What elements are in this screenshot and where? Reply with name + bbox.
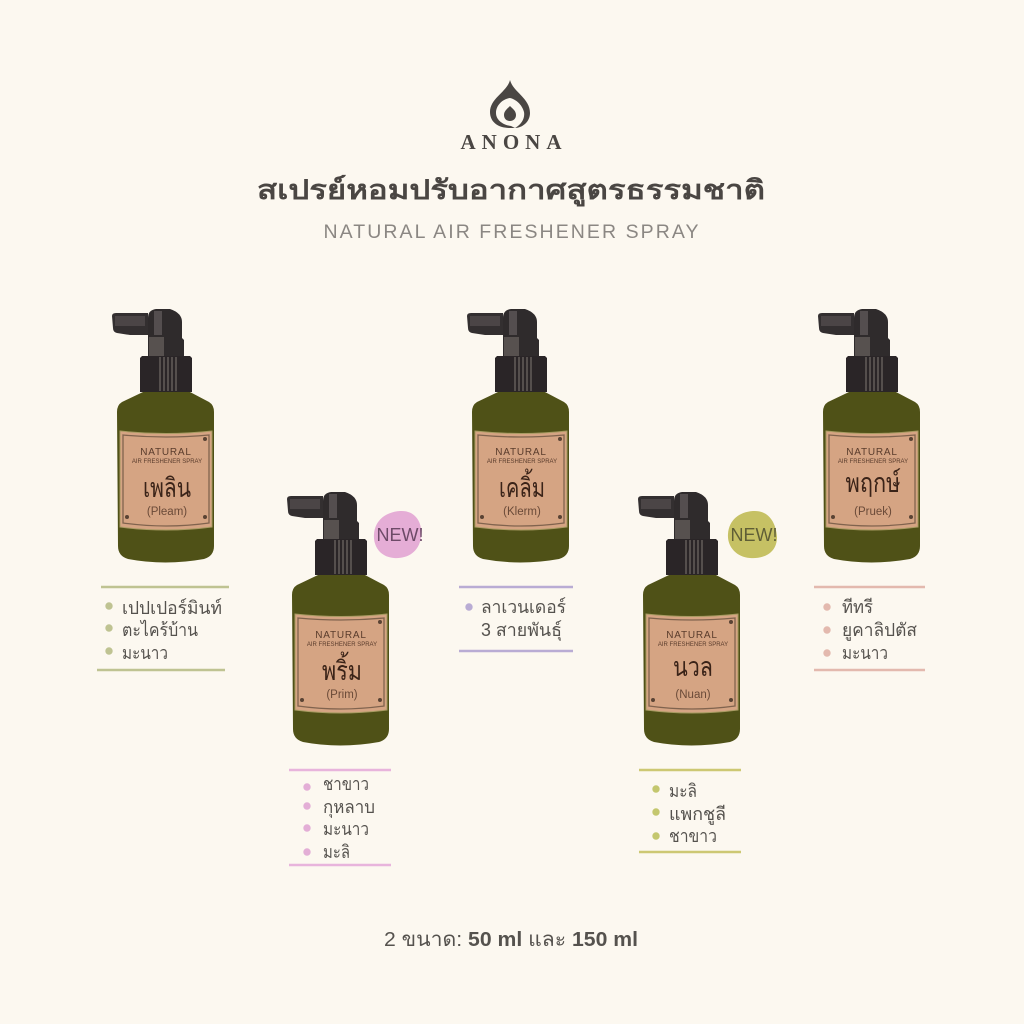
bottle: Pruek: (Pruek)	[854, 506, 892, 518]
bottle: Prim: (Prim)	[326, 689, 358, 701]
bottle: Pleam: AIR FRESHENER SPRAY	[132, 459, 202, 465]
ingredients: Nuan: ชาขาว	[669, 826, 717, 846]
bottle: Pruek: พฤกษ์	[846, 467, 901, 498]
footer: sizes: 2 ขนาด: 50 ml และ 150 ml	[384, 929, 638, 951]
bottle: Pleam: (Pleam)	[147, 506, 187, 518]
bottle: Klerm: NATURAL	[495, 447, 547, 458]
brand name: ANONA	[460, 130, 562, 154]
bottle: Pleam: เพลิน	[143, 473, 191, 503]
ingredients: Pleam	[97, 587, 229, 670]
bottle: Nuan	[638, 492, 740, 746]
ingredients: Pruek: ทีทรี	[842, 597, 873, 617]
bottle: Klerm: (Klerm)	[503, 506, 541, 518]
ingredients: Nuan	[639, 770, 741, 852]
bottle: Prim: AIR FRESHENER SPRAY	[307, 642, 377, 648]
bottle: Pruek: AIR FRESHENER SPRAY	[838, 459, 908, 465]
ingredients: Pleam: มะนาว	[122, 643, 168, 663]
badge: new olive	[728, 511, 778, 558]
ingredients: Pleam: ตะไคร้บ้าน	[122, 619, 198, 640]
ingredients: Prim: มะนาว	[323, 819, 369, 839]
ingredients: Pruek	[814, 587, 925, 670]
ingredients: Klerm: ลาเวนเดอร์	[481, 597, 566, 617]
ingredients: Nuan: แพกชูลี	[669, 804, 726, 825]
ingredients: Pruek: ยูคาลิปตัส	[842, 620, 917, 641]
bottle: Prim: NATURAL	[315, 630, 367, 641]
bottle: Pleam: NATURAL	[140, 447, 192, 458]
badge: new pink: NEW!	[376, 525, 424, 545]
bottle: Klerm	[467, 309, 569, 562]
ingredients: Prim	[289, 770, 391, 865]
ingredients: Pruek: มะนาว	[842, 643, 888, 663]
bottle: Klerm: เคลิ้ม	[499, 468, 545, 503]
bottle: Pruek: NATURAL	[846, 447, 898, 458]
badge: new olive: NEW!	[730, 525, 778, 545]
ingredients: Klerm	[459, 587, 573, 651]
bottle: Prim	[287, 492, 389, 746]
subtitle: NATURAL AIR FRESHENER SPRAY	[324, 221, 698, 243]
badge: new pink	[374, 511, 424, 558]
bottle: Nuan: นวล	[673, 652, 713, 682]
bottle: Nuan: AIR FRESHENER SPRAY	[658, 642, 728, 648]
bottle: Nuan: (Nuan)	[675, 689, 711, 701]
ingredients: Klerm: 3 สายพันธุ์	[481, 620, 562, 641]
ingredients: Pleam: เปปเปอร์มินท์	[122, 598, 222, 618]
bottle: Prim: พริ้ม	[322, 651, 362, 686]
bottle: Klerm: AIR FRESHENER SPRAY	[487, 459, 557, 465]
icon: Anona logo	[490, 80, 530, 128]
ingredients: Prim: กุหลาบ	[323, 797, 375, 818]
bottle: Pruek	[818, 309, 920, 562]
bottle: Nuan: NATURAL	[666, 630, 718, 641]
title: สเปรย์หอมปรับอากาศสูตรธรรมชาติ	[257, 174, 765, 207]
ingredients: Prim: ชาขาว	[323, 774, 369, 794]
ingredients: Prim: มะลิ	[323, 842, 350, 862]
bottle: Pleam	[112, 309, 214, 562]
ingredients: Nuan: มะลิ	[669, 781, 697, 801]
